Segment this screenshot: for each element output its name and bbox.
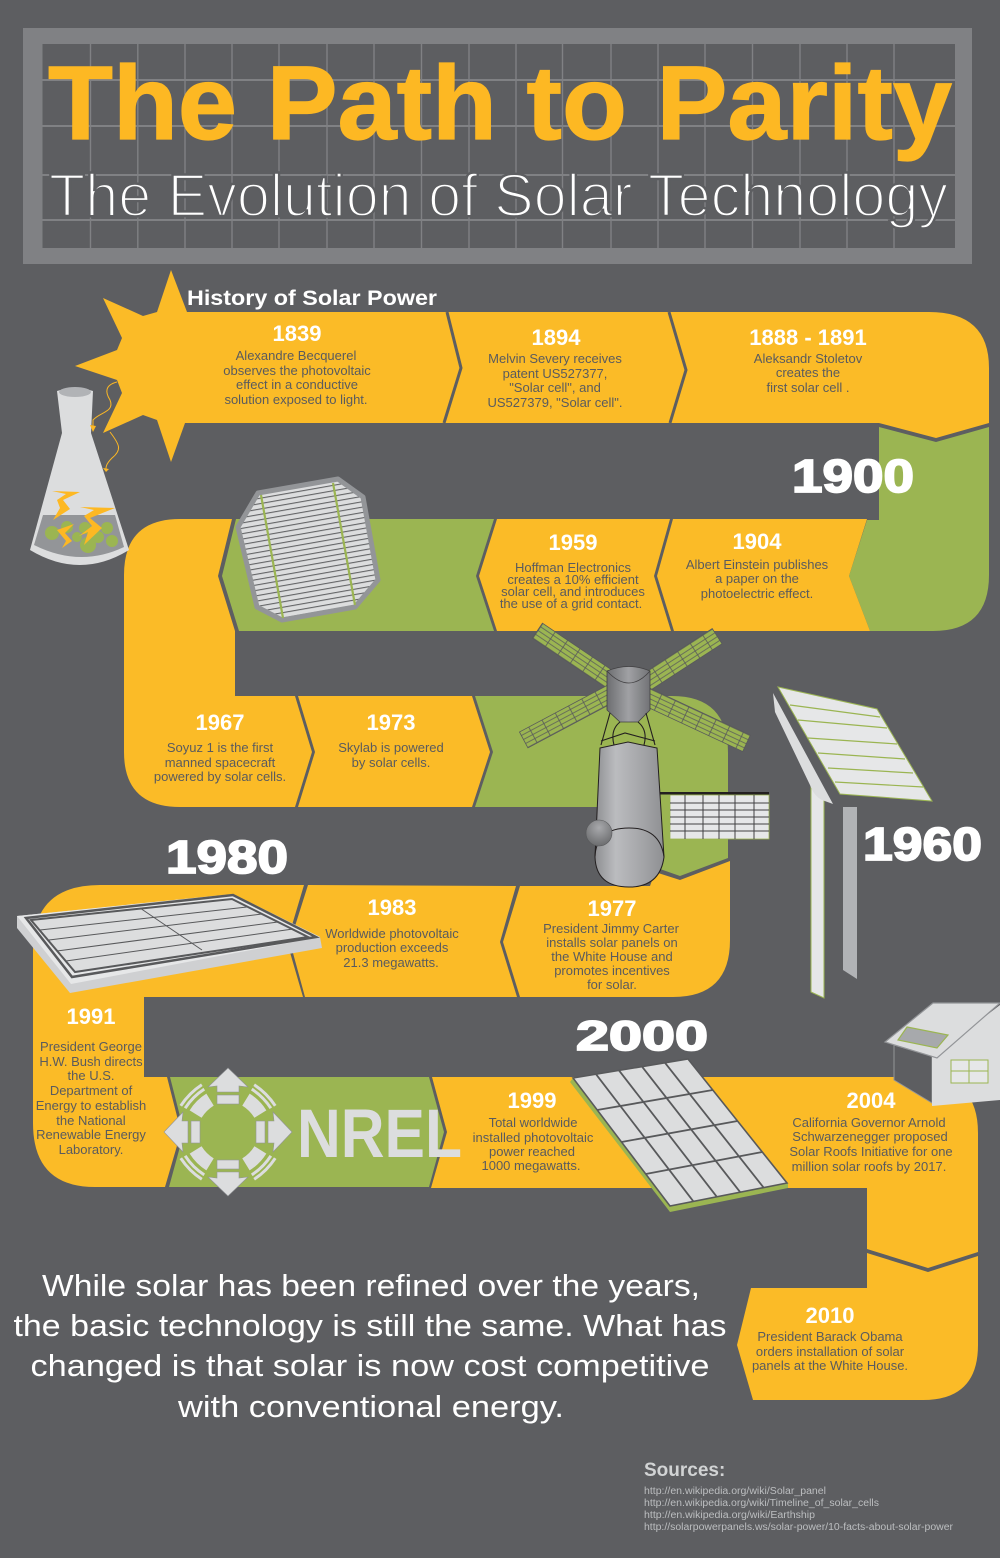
event: 1999: 1000 megawatts. [481,1158,581,1173]
event: 1977: President Jimmy Carter [543,921,680,936]
side panel [660,792,769,794]
header panel [23,28,972,264]
closing statement: While solar has been refined over the years, [42,1268,700,1303]
event: 1977: promotes incentives [554,963,670,978]
path: left bend row four to five [33,885,304,1187]
event: 1959: creates a 10% efficient [507,572,639,587]
event: 1888-1891: creates the [776,365,840,380]
event: 1999: Total worldwide [489,1115,577,1130]
event: 1894: patent US527377, [503,366,607,381]
event: 2004 [789,1088,953,1174]
event: 1967: manned spacecraft [165,755,276,770]
event: 1959: solar cell, and introduces [501,584,645,599]
subtitle: The Evolution of Solar Technology [49,162,948,229]
segment: green solar cell [222,519,494,631]
icon: NREL logo [164,1068,462,1196]
year marker 2000: 2000 [576,1012,708,1059]
event: 1894: Melvin Severy receives [488,351,622,366]
segment: 1959 [479,519,671,631]
icon: satellite [519,623,769,887]
event: 1977: 1977 [588,896,636,921]
event: 1904 [686,529,829,601]
icon: solar panel on stand [773,687,932,998]
event: 1977: the White House and [551,949,673,964]
event: 1999: power reached [489,1144,575,1159]
event: 1991: Department of [50,1083,133,1098]
event: 1894: "Solar cell", and [509,380,601,395]
year marker 1960: 1960 [863,818,982,870]
segment: 1977 [503,861,730,997]
separators between row one segments [444,312,686,423]
segment: 2010 [737,1253,978,1400]
event: 2010: orders installation of solar [756,1344,905,1359]
path: row one band [185,312,989,438]
icon: flask [30,382,129,565]
event: 1977: installs solar panels on [546,935,678,950]
event: 1839: effect in a conductive [236,377,358,392]
event: 1991: Laboratory. [59,1142,123,1157]
closing statement: the basic technology is still the same. What has [14,1308,727,1343]
event: 1983 [325,895,459,970]
event: 1839: 1839 [273,321,321,346]
event: 2004: California Governor Arnold [792,1115,946,1130]
event: 1991: the U.S. [68,1068,114,1083]
event: 1839 [223,321,371,407]
segment: green NREL [169,1077,444,1187]
event: 1894: 1894 [532,325,581,350]
segment: green satellite [475,696,728,876]
icon: flat solar panel [17,894,322,993]
closing statement: with conventional energy. [177,1389,564,1424]
solar arms [519,623,750,751]
path: row five band [431,1077,978,1268]
event: 1973: Skylab is powered [338,740,444,755]
event: 1894 [488,325,622,410]
year marker 1900: 1900 [792,450,914,502]
event: 2010: panels at the White House. [752,1358,908,1373]
event: 1991: President George [40,1039,142,1054]
event: 1888-1891: first solar cell . [766,380,850,395]
hub [607,666,650,722]
segment: 1904 [657,519,870,631]
event: 1894: US527379, "Solar cell". [488,395,622,410]
event: 1991: the National [56,1113,126,1128]
event: 1839: Alexandre Becquerel [236,348,356,363]
event: 2010 [752,1303,908,1373]
event: 1973 [338,710,444,770]
icon: NREL logo: NREL [297,1095,462,1172]
event: 1983: 1983 [368,895,416,920]
event: 1977 [543,896,680,992]
event: 1959: 1959 [549,530,597,555]
event: 1888-1891 [749,325,867,395]
event: 1999 [473,1088,594,1173]
event: 1904: photoelectric effect. [701,586,813,601]
event: 1973: 1973 [367,710,415,735]
event: 1991: Renewable Energy [36,1127,146,1142]
event: 1977: for solar. [587,977,637,992]
closing statement: changed is that solar is now cost competitive [30,1348,710,1383]
sun [75,270,200,462]
event: 2004: million solar roofs by 2017. [792,1159,946,1174]
event: 2004: 2004 [847,1088,896,1113]
icon: large solar panel 2000 [570,1059,788,1212]
segment: 1983 [290,885,517,997]
year marker 1980: 1980 [166,831,288,883]
sources [644,1460,954,1533]
event: 1959 [500,530,645,611]
sources: http://en.wikipedia.org/wiki/Timeline_of_solar_cells [644,1498,879,1509]
sources: Sources: [644,1460,725,1481]
sphere [586,820,612,846]
event: 1967: 1967 [196,710,244,735]
sources: http://en.wikipedia.org/wiki/Earthship [644,1510,815,1521]
event: 1839: solution exposed to light. [224,392,368,407]
history heading: History of Solar Power [187,287,437,310]
event: 1959: Hoffman Electronics [515,560,632,575]
closing statement [14,1268,727,1424]
event: 1839: observes the photovoltaic [223,363,371,378]
main body [595,742,664,887]
event: 1999: 1999 [508,1088,556,1113]
event: 1991: 1991 [67,1004,115,1029]
icon: house with roof panel [885,1003,1000,1106]
event: 1959: the use of a grid contact. [500,596,642,611]
event: 1991: H.W. Bush directs [39,1054,143,1069]
event: 1888-1891: Aleksandr Stoletov [754,351,863,366]
event: 1967: powered by solar cells. [154,769,286,784]
sources: http://en.wikipedia.org/wiki/Solar_panel [644,1486,826,1497]
event: 2004: Schwarzenegger proposed [792,1129,948,1144]
event: 1967 [154,710,286,784]
event: 1991: Energy to establish [36,1098,146,1113]
event: 1973: by solar cells. [352,755,430,770]
event: 1967: Soyuz 1 is the first [167,740,273,755]
event: 1999: installed photovoltaic [473,1130,594,1145]
icon: solar cell [238,479,378,620]
event: 2004: Solar Roofs Initiative for one [789,1144,953,1159]
event: 1983: 21.3 megawatts. [343,955,439,970]
event: 2010: 2010 [806,1303,854,1328]
path: green bend 1900 [849,427,989,631]
title: The Path to Parity [48,45,952,162]
segment: 1973 [298,696,490,807]
event: 2010: President Barack Obama [757,1329,903,1344]
event: 1904: 1904 [733,529,782,554]
struts [601,713,655,745]
event: 1888-1891: 1888 - 1891 [749,325,867,350]
event: 1904: Albert Einstein publishes [686,557,829,572]
event: 1983: production exceeds [336,940,449,955]
event: 1983: Worldwide photovoltaic [325,926,459,941]
event: 1904: a paper on the [715,571,799,586]
event: 1991 [36,1004,146,1157]
sources: http://solarpowerpanels.ws/solar-power/10-facts-about-solar-power [644,1522,954,1533]
path: left bend row two to three [124,519,312,807]
